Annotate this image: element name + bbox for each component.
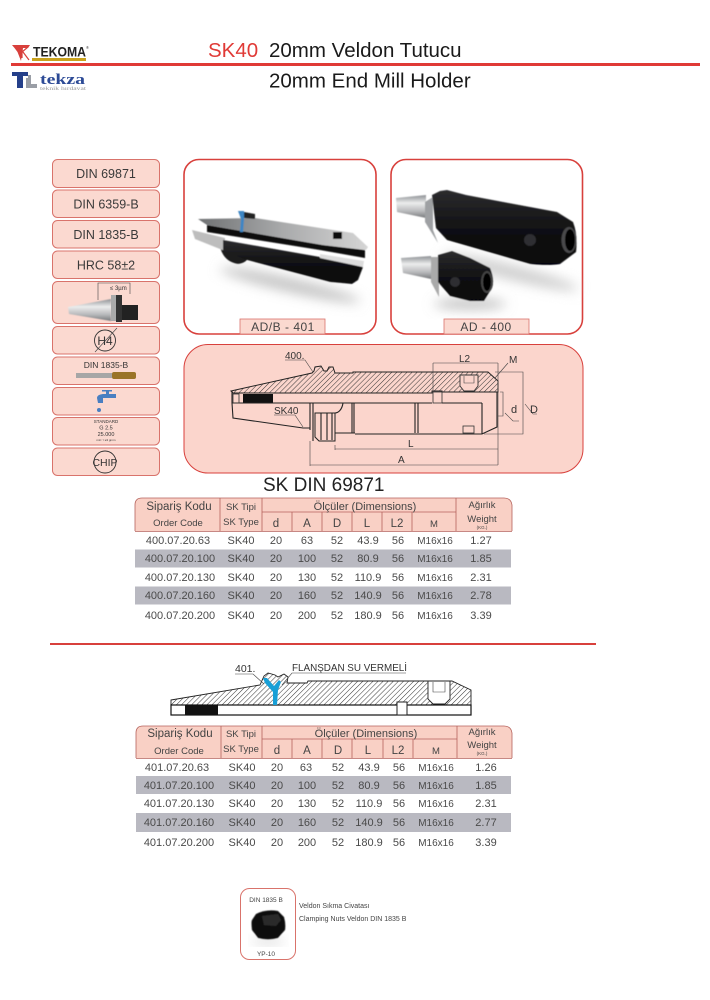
icon: coolant tap	[52, 388, 160, 415]
rows: 52	[331, 590, 343, 602]
rows: 56	[392, 610, 404, 622]
icon: set screw	[252, 910, 285, 944]
rows: 63	[300, 762, 312, 774]
title: 20mm Veldon Tutucu	[269, 39, 462, 62]
table header	[136, 726, 512, 758]
rows: 52	[331, 553, 343, 565]
rows: 1.26	[475, 762, 497, 774]
rows: 52	[332, 762, 344, 774]
rows: 56	[393, 837, 405, 849]
rows: M16x16	[418, 781, 454, 792]
standard: DIN 69871: DIN 69871	[76, 167, 136, 181]
icon: runout tolerance	[52, 282, 160, 324]
balance data: STANDARD	[94, 419, 119, 424]
table header: SK Type	[223, 517, 259, 528]
standard: DIN 6359-B: DIN 6359-B	[73, 198, 139, 212]
rows: SK40	[229, 817, 255, 829]
rows: 140.9	[355, 817, 383, 829]
panel: AD-400 photo	[391, 160, 582, 334]
label: FLANŞDAN SU VERMELİ	[282, 661, 407, 685]
rows: 52	[332, 798, 344, 810]
table header: L2	[392, 745, 404, 757]
rows: 3.39	[470, 610, 492, 622]
rows: SK40	[228, 553, 254, 565]
table header: Ölçüler (Dimensions)	[314, 501, 416, 513]
rows: 1.27	[470, 535, 492, 547]
table header: Ağırlık	[469, 500, 496, 511]
card: YP-10 clamping screw: DIN 1835 B	[249, 897, 283, 904]
rows: 100	[298, 780, 316, 792]
table: 400 series	[135, 498, 512, 622]
row bands	[135, 550, 511, 604]
label: AD/B - 401: AD/B - 401	[251, 320, 315, 334]
table header: d	[274, 745, 280, 757]
photo: long and short holders	[396, 190, 580, 309]
logo: Tekza	[12, 72, 87, 92]
table header: SK Tipi	[226, 729, 256, 740]
logo: Tekoma: ®	[86, 45, 89, 50]
rows: SK40	[228, 572, 254, 584]
hardness	[52, 251, 160, 278]
rows: 400.07.20.63	[146, 535, 210, 547]
balance data: 25.000	[98, 432, 114, 438]
table header	[135, 498, 512, 532]
rows: M16x16	[418, 818, 454, 829]
table header: Ölçüler (Dimensions)	[315, 728, 417, 740]
rows: 20	[270, 553, 282, 565]
rows: 52	[331, 572, 343, 584]
label: 401.: 401.	[235, 663, 255, 675]
label: AD - 400: AD - 400	[460, 320, 512, 334]
dimensions: 400.	[285, 351, 304, 362]
rows: 401.07.20.100	[144, 780, 214, 792]
table header: Order Code	[154, 746, 204, 757]
table header: Ağırlık	[469, 727, 496, 738]
logo: Tekza: tekza	[40, 72, 86, 88]
rows: 52	[331, 610, 343, 622]
icon: chip: CHIP	[92, 457, 118, 469]
row bands	[136, 776, 511, 832]
rows: M16x16	[417, 573, 453, 584]
rows: 20	[271, 817, 283, 829]
rows: SK40	[229, 798, 255, 810]
rows: 401.07.20.200	[144, 837, 214, 849]
hardness: HRC 58±2	[77, 258, 135, 272]
rows: 20	[271, 780, 283, 792]
rows: 56	[393, 798, 405, 810]
rows: 180.9	[355, 837, 383, 849]
rows: 160	[298, 590, 316, 602]
rows: 56	[392, 535, 404, 547]
subtitle: SK DIN 69871: SK DIN 69871	[263, 475, 384, 496]
rows: M16x16	[418, 763, 454, 774]
label: AD - 400	[444, 319, 529, 334]
drawing: 401 flange coolant section	[171, 661, 471, 715]
table header: Weight	[467, 740, 497, 751]
rows: 43.9	[357, 535, 379, 547]
rows: 110.9	[356, 798, 382, 810]
rows: 56	[393, 780, 405, 792]
rows: 401.07.20.130	[144, 798, 214, 810]
dimensions: D	[530, 404, 538, 416]
rows: 130	[298, 572, 316, 584]
rows: 200	[298, 610, 316, 622]
dimensions: L	[408, 439, 414, 450]
rows: SK40	[228, 535, 254, 547]
icon: runout tolerance: ≤ 3µm	[110, 286, 127, 292]
rows: 1.85	[470, 553, 492, 565]
rows: M16x16	[418, 838, 454, 849]
rows: 56	[392, 553, 404, 565]
rows: 400.07.20.130	[145, 572, 215, 584]
caption: clamping nuts: Clamping Nuts Veldon DIN 1835 B	[299, 916, 407, 923]
panel: technical drawing SK40 400	[184, 344, 583, 473]
rows: M16x16	[417, 536, 453, 547]
rows: 100	[298, 553, 316, 565]
panel: AD/B-401 photo	[184, 160, 376, 334]
rows: 20	[271, 837, 283, 849]
rows: 130	[298, 798, 316, 810]
dimensions: L2	[459, 354, 471, 365]
rows: 2.31	[475, 798, 497, 810]
title	[208, 39, 471, 92]
rows: M16x16	[418, 799, 454, 810]
table header: Order Code	[153, 518, 203, 529]
standard: DIN 69871	[52, 160, 160, 188]
dimensions: SK40	[274, 406, 299, 417]
rows: 140.9	[354, 590, 382, 602]
rows: 20	[270, 610, 282, 622]
rows: 1.85	[475, 780, 497, 792]
table header: Sipariş Kodu	[147, 728, 213, 740]
table header: A	[303, 518, 311, 530]
rows: 20	[271, 762, 283, 774]
title: 20mm End Mill Holder	[269, 70, 471, 92]
rows: 400.07.20.100	[145, 553, 215, 565]
table header: L	[365, 745, 372, 757]
logo: Tekoma	[12, 44, 89, 61]
rows: 110.9	[355, 572, 381, 584]
dimensions	[274, 351, 538, 466]
card: YP-10 clamping screw: YP-10	[257, 951, 275, 958]
rows	[144, 762, 497, 849]
rows: M16x16	[417, 611, 453, 622]
rows: 3.39	[475, 837, 497, 849]
header rule	[11, 63, 700, 66]
caption: clamping nuts	[299, 903, 407, 923]
standard: DIN 6359-B	[52, 190, 160, 218]
rows: SK40	[228, 610, 254, 622]
table: 401 series	[136, 726, 512, 849]
table header: D	[334, 745, 342, 757]
rows: 63	[301, 535, 313, 547]
table header: D	[333, 518, 341, 530]
rows: 52	[332, 837, 344, 849]
section divider	[50, 643, 596, 645]
rows: SK40	[229, 780, 255, 792]
rows: 20	[270, 572, 282, 584]
rows: SK40	[229, 837, 255, 849]
label: 401.	[235, 663, 264, 684]
rows: 20	[271, 798, 283, 810]
rows: 56	[393, 817, 405, 829]
table header: (KG.)	[477, 751, 488, 756]
rows: 401.07.20.63	[145, 762, 209, 774]
rows: 401.07.20.160	[144, 817, 214, 829]
icon: H4 balance	[52, 326, 160, 354]
table header: Weight	[467, 514, 497, 525]
rows: 160	[298, 817, 316, 829]
table header: M	[430, 519, 438, 530]
table header: d	[273, 518, 279, 530]
icon: chip	[52, 448, 160, 476]
title: SK40	[208, 39, 258, 62]
rows: 56	[392, 590, 404, 602]
table header: M	[432, 746, 440, 757]
logo: Tekoma: TEKOMA	[33, 44, 86, 60]
rows: 20	[270, 535, 282, 547]
balance data: min⁻¹ ≤3 gmm	[96, 438, 116, 442]
rows: 400.07.20.200	[145, 610, 215, 622]
rows: SK40	[228, 590, 254, 602]
rows: 400.07.20.160	[145, 590, 215, 602]
card: YP-10 clamping screw	[240, 888, 296, 960]
balance data: G 2.5	[99, 426, 113, 432]
section: hatched upper half	[231, 366, 498, 403]
rows: 43.9	[358, 762, 380, 774]
caption: clamping nuts: Veldon Sıkma Civatası	[299, 903, 369, 910]
feature column	[52, 160, 160, 476]
table header: A	[303, 745, 311, 757]
rows: 200	[298, 837, 316, 849]
icon: H4 balance: H4	[97, 334, 113, 348]
table header: SK Tipi	[226, 502, 256, 513]
section: plain lower half	[232, 391, 497, 441]
table header: SK Type	[223, 744, 259, 755]
rows: 52	[332, 780, 344, 792]
rows	[145, 535, 492, 622]
photo: sectioned holder	[192, 211, 368, 308]
rows: 20	[270, 590, 282, 602]
dimensions: d	[511, 404, 517, 416]
rows: 56	[392, 572, 404, 584]
rows: 2.31	[470, 572, 492, 584]
rows: 2.78	[470, 590, 492, 602]
table header: (KG.)	[477, 525, 488, 530]
rows: 80.9	[358, 780, 380, 792]
icon: DIN 1835-B end mill	[52, 357, 160, 384]
rows: 2.77	[475, 817, 497, 829]
balance data	[52, 418, 160, 445]
table header: L2	[391, 518, 403, 530]
rows: 52	[332, 817, 344, 829]
rows: SK40	[229, 762, 255, 774]
label: AD/B - 401	[240, 319, 325, 334]
table header: L	[364, 518, 371, 530]
label: FLANŞDAN SU VERMELİ: FLANŞDAN SU VERMELİ	[292, 661, 407, 674]
rows: 180.9	[354, 610, 382, 622]
standard: DIN 1835-B: DIN 1835-B	[73, 228, 139, 242]
rows: 56	[393, 762, 405, 774]
icon: DIN 1835-B end mill: DIN 1835-B	[84, 360, 129, 370]
dimensions: M	[509, 355, 517, 366]
rows: 52	[331, 535, 343, 547]
table header: Sipariş Kodu	[146, 501, 212, 513]
rows: M16x16	[417, 591, 453, 602]
rows: 80.9	[357, 553, 379, 565]
logo: Tekza: teknik hırdavat	[40, 86, 87, 92]
rows: M16x16	[417, 554, 453, 565]
standard: DIN 1835-B	[52, 220, 160, 248]
dimensions: A	[398, 455, 405, 466]
